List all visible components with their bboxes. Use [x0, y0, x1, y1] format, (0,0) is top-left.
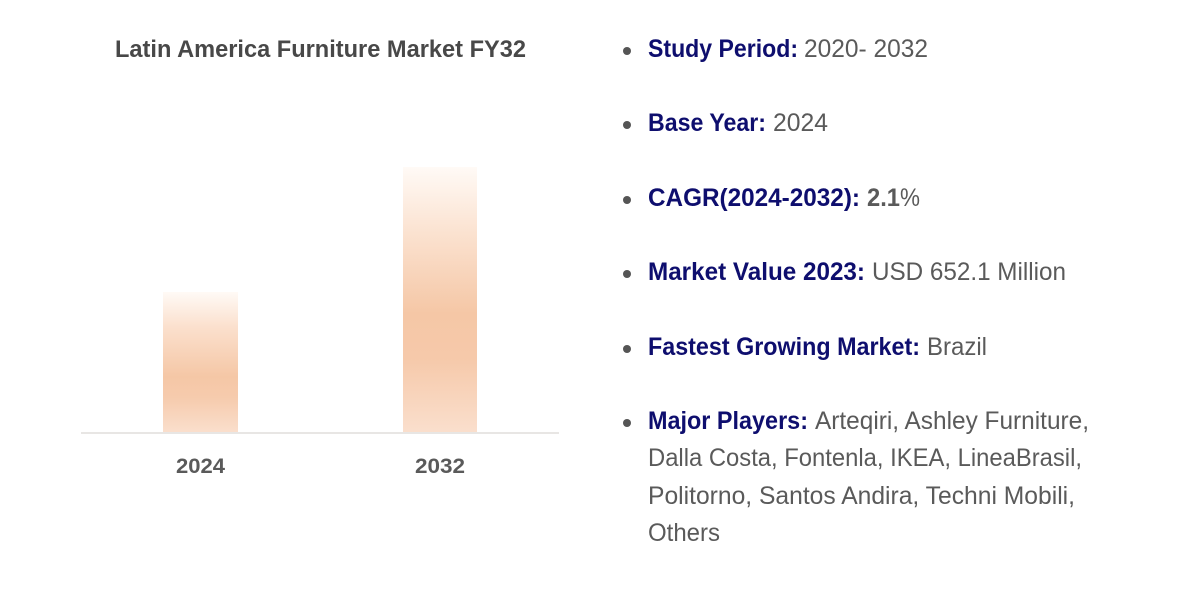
item: study period: Study Period:	[648, 35, 798, 63]
item: study period: 2020- 2032	[804, 35, 928, 63]
item: CAGR: 2.1	[867, 184, 900, 212]
bar: 2032	[403, 167, 477, 433]
axis label: 2032: 2032	[415, 455, 465, 478]
key facts list	[623, 35, 1089, 547]
item: fastest growing market: Fastest Growing Market:	[648, 333, 920, 361]
item: fastest growing market: Brazil	[927, 333, 987, 361]
bar chart	[81, 167, 559, 478]
chart title: Latin America Furniture Market FY32	[115, 36, 526, 63]
axis label: 2024: 2024	[176, 455, 225, 478]
item: major players	[623, 407, 1089, 547]
item: base year: Base Year:	[648, 109, 766, 137]
item: market value: USD 652.1 Million	[872, 258, 1066, 286]
bar: 2024	[163, 292, 238, 433]
item: market value: Market Value 2023:	[648, 258, 865, 286]
item: base year: 2024	[773, 109, 828, 137]
item: major players: Others	[648, 519, 720, 547]
axis line	[81, 432, 559, 434]
item: market value	[623, 258, 1066, 286]
item: major players: Arteqiri, Ashley Furniture,	[815, 407, 1089, 435]
item: major players: Major Players:	[648, 407, 808, 435]
item: major players: Dalla Costa, Fontenla, IKEA, LineaBrasil,	[648, 444, 1082, 472]
item: CAGR: CAGR(2024-2032):	[648, 184, 860, 212]
item: CAGR: %	[900, 184, 920, 212]
item: base year	[623, 109, 828, 137]
item: study period	[623, 35, 928, 63]
item: major players: Politorno, Santos Andira, Techni Mobili,	[648, 482, 1075, 510]
